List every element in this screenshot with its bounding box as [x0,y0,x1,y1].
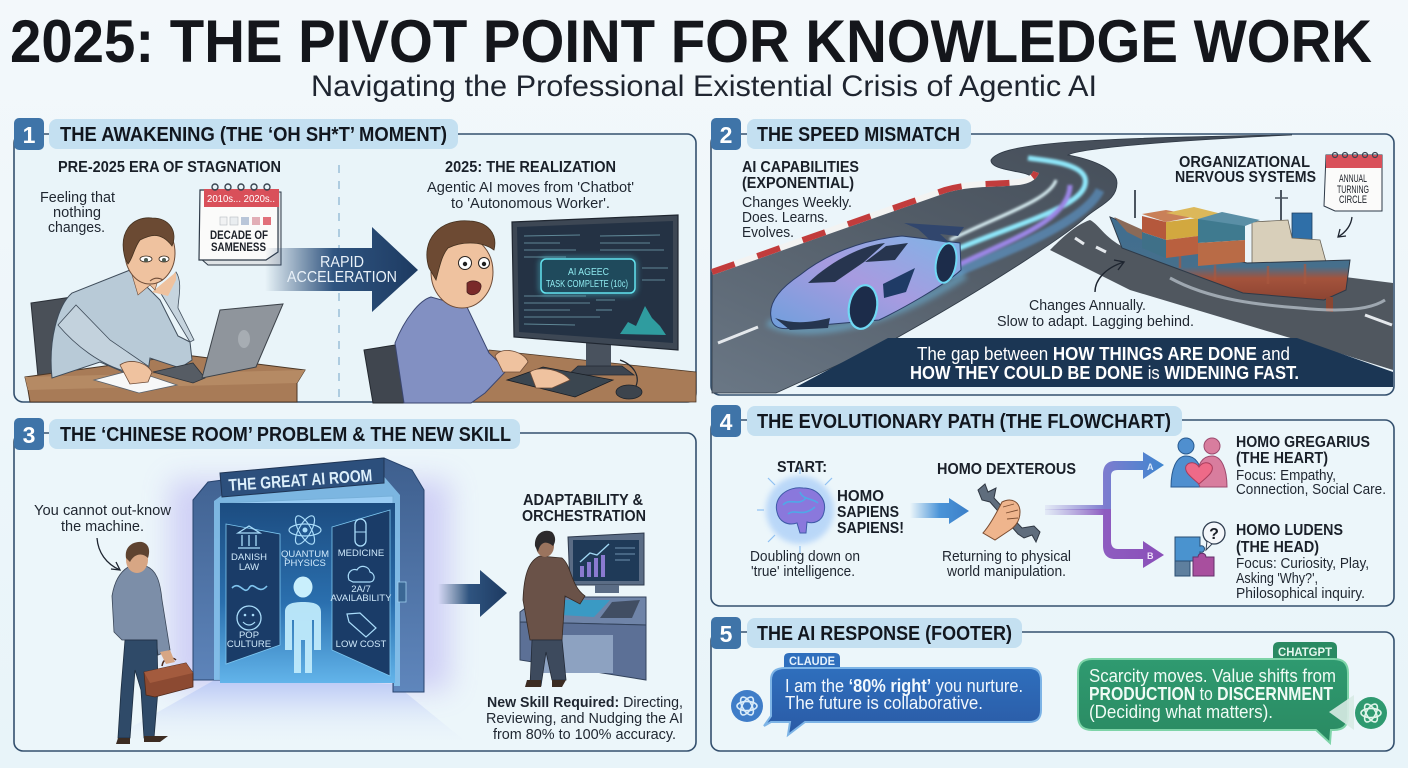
panel 1: the awakening [14,118,696,403]
icon: annual turning circle calendar: CIRCLE [1339,194,1367,206]
arrow: branch B down [1045,509,1164,568]
icon: danish law: LAW [239,562,259,573]
section number badge 5 [711,617,741,649]
text: agentic AI: Agentic AI moves from 'Chatbot' [427,179,634,196]
icon: chatgpt avatar [1355,697,1387,729]
text: new skill required: from 80% to 100% accuracy. [493,726,676,743]
text: homo gregarius: HOMO GREGARIUS [1236,434,1370,451]
callout: chatgpt: CHATGPT [1278,645,1333,659]
section number badge 2 [711,118,741,150]
banner: the gap is widening [796,338,1393,387]
callout: chatgpt: (Deciding what matters). [1089,701,1273,722]
subtitle: Navigating the Professional Existential Crisis of Agentic AI [311,70,1097,103]
banner: the gap is widening: The gap between HOW THINGS ARE DONE and [917,344,1290,364]
text: homo ludens: Asking 'Why?', [1236,570,1318,587]
text: homo sapiens sapiens [837,488,904,537]
section heading 3: THE ‘CHINESE ROOM’ PROBLEM & THE NEW SKILL [60,424,511,446]
banner: the gap is widening: HOW THEY COULD BE DONE is WIDENING FAST. [910,363,1299,383]
icon: low cost [336,613,387,650]
icon: calendar decade of sameness: 2010s... 2020s.. [207,194,275,205]
text: feeling that nothing changes [40,189,116,236]
callout: chatgpt: Scarcity moves. Value shifts from [1089,665,1336,686]
section heading 2: THE SPEED MISMATCH [757,124,960,146]
text: AI capabilities: (EXPONENTIAL) [742,175,854,192]
section number badge 4 [711,405,741,437]
text: AI capabilities: Evolves. [742,224,794,241]
text: new skill required [486,694,683,743]
callout: claude: CLAUDE [789,656,835,668]
icon: medicine: MEDICINE [338,548,384,559]
icon: glowing brain [757,467,834,553]
text: returning to physical [942,548,1071,580]
AI figure [285,576,321,673]
icon: danish law [231,526,267,573]
section heading 5: THE AI RESPONSE (FOOTER) [757,623,1012,645]
section heading 1 [49,119,458,149]
illustration: the great AI room door [193,458,424,692]
icon: quantum physics: PHYSICS [284,558,326,569]
text: changes annually: Slow to adapt. Lagging behind. [997,313,1194,330]
label: start: START: [777,459,827,476]
arrow: branch A up: A [1147,462,1154,472]
text: returning to physical: Returning to physical [942,548,1071,565]
illustration: orchestrator at console [520,531,646,687]
text: new skill required: New Skill Required: Directing, [487,694,683,711]
arrow: calendar annotation [1338,217,1352,237]
subheading: adaptability & orchestration: ORCHESTRATION [522,508,646,525]
illustration: man with briefcase [112,542,193,744]
illustration: rusty container ship [1110,190,1385,312]
section heading 3 [49,419,520,449]
section heading 5 [747,618,1022,648]
text: homo ludens [1236,522,1369,602]
sign: the great AI room: THE GREAT AI ROOM [228,466,373,495]
icon: availability [331,566,392,604]
illustration: shocked worker at monitor: AI AGEEC [568,267,609,278]
text: organizational nervous systems [1175,154,1316,186]
arrow: branch A up [1045,452,1164,510]
text: organizational nervous systems: ORGANIZATIONAL [1179,154,1310,171]
text: homo sapiens sapiens: SAPIENS [837,504,899,521]
text: you cannot out-know: You cannot out-know [34,502,171,519]
text: doubling down: Doubling down on [750,548,860,565]
section number badge 3 [14,418,44,450]
text: AI capabilities: Changes Weekly. [742,194,852,211]
text: feeling that nothing changes: changes. [48,219,105,236]
icon: claude avatar [731,690,763,722]
text: feeling that nothing changes: nothing [53,204,101,221]
icon: annual turning circle calendar: TURNING [1337,184,1369,196]
road: main track [712,135,1292,393]
arrow: branch B down: B [1147,551,1154,561]
subheading: pre-2025: PRE-2025 ERA OF STAGNATION [58,159,281,176]
panel 2: the speed mismatch [711,118,1394,395]
text: homo gregarius: Connection, Social Care. [1236,481,1386,498]
icon: pop culture [227,606,271,650]
callout: claude: I am the ‘80% right’ you nurture. [785,675,1023,696]
floor light [100,678,470,745]
text: feeling that nothing changes: Feeling that [40,189,116,206]
text: returning to physical: world manipulation. [946,563,1066,580]
section heading 1: THE AWAKENING (THE ‘OH SH*T’ MOMENT) [60,124,447,146]
text: homo gregarius [1236,434,1386,498]
text: agentic AI: to 'Autonomous Worker'. [451,195,610,212]
icon: annual turning circle calendar [1324,152,1382,211]
motion streaks [950,158,1100,275]
text: organizational nervous systems: NERVOUS SYSTEMS [1175,169,1316,186]
arrow: rapid acceleration [265,227,418,312]
section heading 2 [747,119,971,149]
glow behind door [170,480,450,690]
illustration: bored worker at laptop [25,218,305,402]
icon: annual turning circle calendar: ANNUAL [1339,173,1367,185]
arrow: to homo dexterous [910,498,969,524]
arrow: to orchestration [438,570,507,617]
icon: quantum physics [281,513,329,569]
subheading: adaptability & orchestration [522,492,646,525]
icon: hand with wrench [978,484,1040,542]
subheading: adaptability & orchestration: ADAPTABILITY & [523,492,643,509]
text: homo ludens: HOMO LUDENS [1236,522,1343,539]
lane markings [718,238,1392,343]
arrow: rapid acceleration: ACCELERATION [287,269,397,286]
icon: pop culture: CULTURE [227,639,271,650]
section number badge 3: 3 [23,422,35,448]
callout: claude [764,653,1041,735]
road: lower branch [1050,220,1393,370]
icon: low cost: LOW COST [336,639,387,650]
icon: puzzle and question bubble: ? [1209,526,1219,543]
arrow: machine annotation [97,538,120,570]
arrow: rapid acceleration: RAPID [320,254,364,271]
text: homo sapiens sapiens: SAPIENS! [837,520,904,537]
section heading 4 [747,406,1182,436]
arrow: ship annotation [1095,260,1124,292]
text: AI capabilities [742,159,859,241]
subheading: 2025 realization: 2025: THE REALIZATION [445,159,616,176]
section number badge 1: 1 [23,122,36,148]
section number badge 4: 4 [720,409,733,435]
icon: calendar decade of sameness [199,184,281,265]
panel 5: the AI response [711,617,1394,751]
icon: couple with heart [1171,438,1227,487]
text: new skill required: Reviewing, and Nudging the AI [486,710,683,727]
text: agentic AI [427,179,634,212]
sign: the great AI room [220,458,384,497]
callout: claude: The future is collaborative. [785,692,983,713]
icon: availability: 2A/7 [351,584,371,595]
icon: calendar decade of sameness: SAMENESS [211,240,266,254]
text: homo sapiens sapiens: HOMO [837,488,884,505]
illustration: exponential sports car [771,223,964,331]
panel 4: the evolutionary path [711,405,1394,606]
icon: wave [232,586,267,590]
text: doubling down: 'true' intelligence. [751,563,855,580]
text: homo gregarius: Focus: Empathy, [1236,467,1336,484]
section number badge 2: 2 [720,122,732,148]
illustration: shocked worker at monitor [364,215,696,403]
section number badge 5: 5 [720,621,733,647]
icon: calendar decade of sameness: DECADE OF [210,228,268,242]
text: homo ludens: Focus: Curiosity, Play, [1236,555,1369,572]
text: homo gregarius: (THE HEART) [1236,450,1328,467]
car glow [768,275,965,330]
text: you cannot out-know: the machine. [61,518,144,535]
icon: puzzle and question bubble [1175,522,1225,576]
red and white curb [712,172,1036,272]
icon: availability: AVAILABILITY [331,593,392,604]
icon: pop culture: POP [239,630,259,641]
text: changes annually: Changes Annually. [1029,297,1146,314]
icon: medicine [338,519,384,559]
panel 3: the chinese room [14,418,696,751]
section heading 4: THE EVOLUTIONARY PATH (THE FLOWCHART) [757,411,1171,433]
text: changes annually [997,297,1194,330]
text: AI capabilities: AI CAPABILITIES [742,159,859,176]
text: homo ludens: (THE HEAD) [1236,539,1319,556]
text: homo ludens: Philosophical inquiry. [1236,585,1365,602]
section number badge 1 [14,118,44,150]
icon: danish law: DANISH [231,552,267,563]
text: you cannot out-know [34,502,171,535]
callout: chatgpt: PRODUCTION to DISCERNMENT [1089,683,1334,704]
callout: chatgpt [1078,642,1354,743]
text: AI capabilities: Does. Learns. [742,209,828,226]
illustration: shocked worker at monitor: TASK COMPLETE (10c) [546,279,628,290]
text: doubling down [750,548,860,580]
label: homo dexterous: HOMO DEXTEROUS [937,461,1076,478]
icon: quantum physics: QUANTUM [281,549,329,560]
